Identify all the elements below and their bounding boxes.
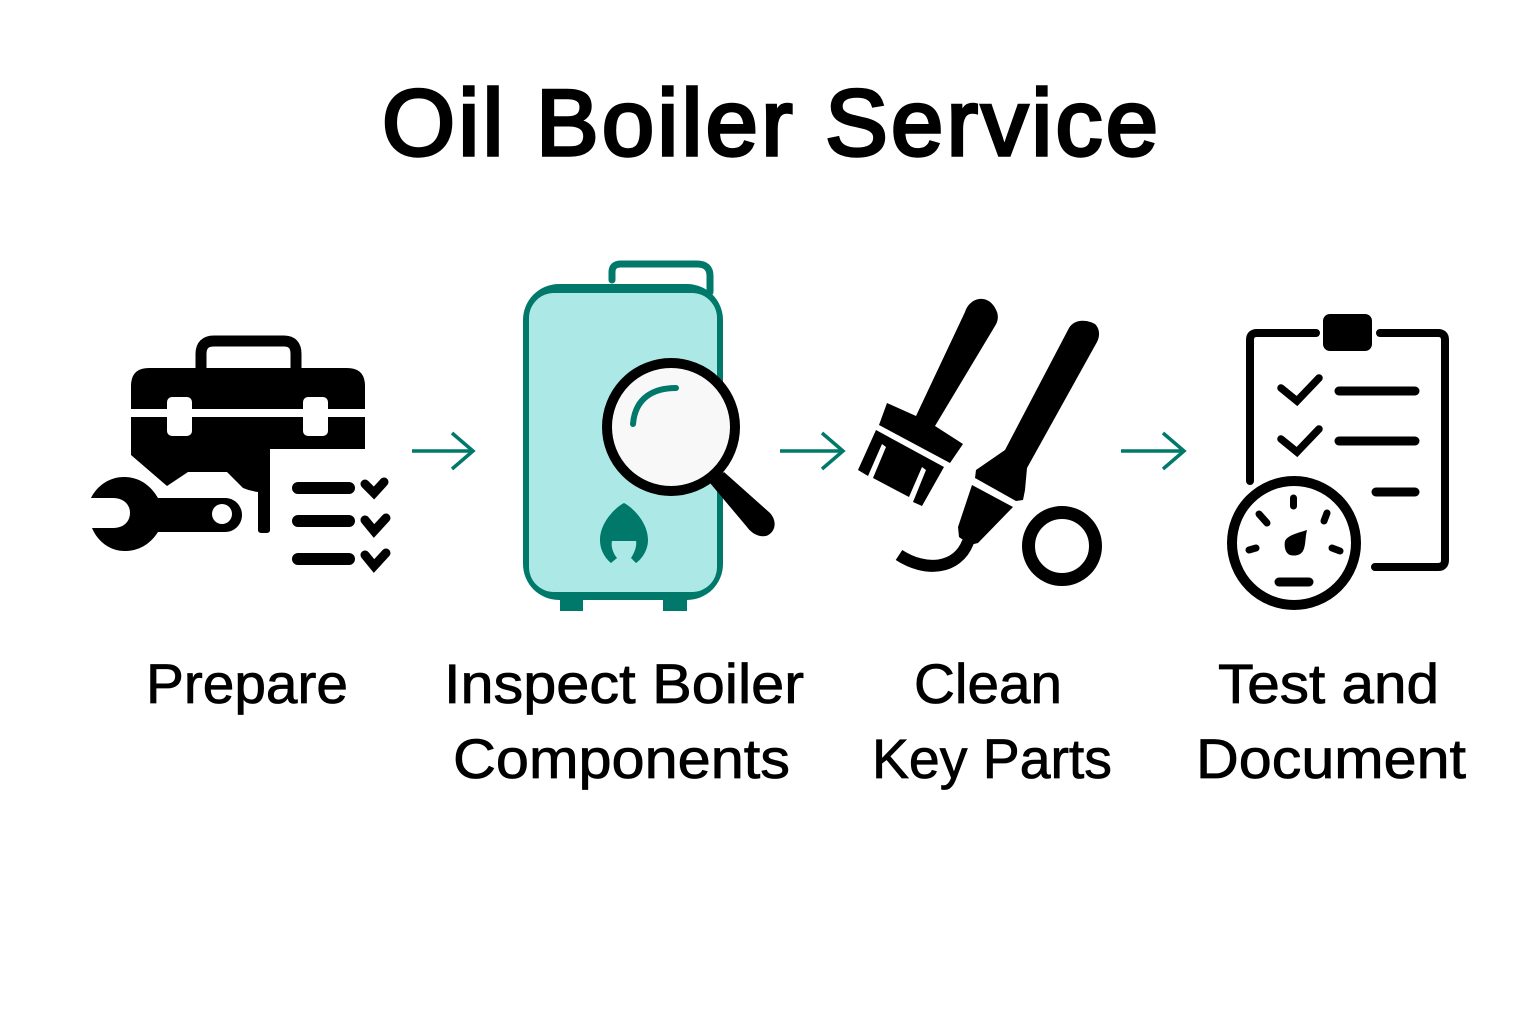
icon: toolbox with wrench and checklist bbox=[91, 341, 386, 566]
label: clean key parts bbox=[872, 652, 1112, 790]
checklist checks bbox=[365, 482, 386, 566]
label: clean key parts: Key Parts bbox=[872, 727, 1112, 790]
flat brush bristles bbox=[858, 430, 944, 506]
arrow: clean to test bbox=[1121, 433, 1184, 469]
label: test and document: Test and bbox=[1218, 652, 1439, 715]
label: prepare: Prepare bbox=[146, 652, 348, 715]
icon: cleaning brushes and ring bbox=[858, 299, 1099, 580]
magnifier lens bbox=[607, 363, 735, 491]
label: inspect boiler components bbox=[444, 652, 804, 790]
toolbox handle bbox=[201, 341, 296, 372]
label: inspect boiler components: Inspect Boiler bbox=[444, 652, 804, 715]
arrow: inspect to clean bbox=[780, 433, 843, 469]
label: inspect boiler components: Components bbox=[453, 727, 790, 790]
clipboard lines bbox=[1339, 391, 1415, 492]
wrench bbox=[91, 477, 242, 551]
brush cable bbox=[899, 542, 968, 566]
label: test and document: Document bbox=[1196, 727, 1466, 790]
icon: boiler with magnifier bbox=[523, 264, 775, 611]
round brush handle bbox=[975, 321, 1099, 501]
gauge needle bbox=[1285, 530, 1307, 556]
boiler feet bbox=[560, 596, 687, 611]
clipboard outline bbox=[1250, 333, 1445, 567]
arrow: prepare to inspect bbox=[412, 433, 473, 469]
toolbox lid bbox=[131, 368, 365, 409]
label: test and document bbox=[1196, 652, 1466, 790]
clipboard checks bbox=[1281, 378, 1319, 452]
label: clean key parts: Clean bbox=[914, 652, 1062, 715]
magnifier highlight bbox=[633, 388, 676, 424]
checklist bars bbox=[298, 488, 349, 559]
toolbox latches bbox=[167, 397, 328, 436]
gauge dial bbox=[1232, 481, 1356, 605]
boiler body fill bbox=[529, 293, 717, 592]
gauge ticks bbox=[1249, 498, 1340, 582]
flat brush handle and ferrule bbox=[879, 299, 998, 463]
clipboard clip bbox=[1323, 314, 1372, 351]
magnifier handle bbox=[710, 472, 775, 536]
boiler top handle bbox=[612, 264, 710, 292]
icon: clipboard with gauge bbox=[1232, 314, 1445, 605]
toolbox body bbox=[131, 417, 365, 533]
title: Oil Boiler Service bbox=[382, 70, 1158, 175]
boiler flame bbox=[600, 503, 648, 563]
ring bbox=[1028, 512, 1096, 580]
round brush tip bbox=[958, 485, 1013, 545]
boiler body outline bbox=[523, 284, 723, 600]
